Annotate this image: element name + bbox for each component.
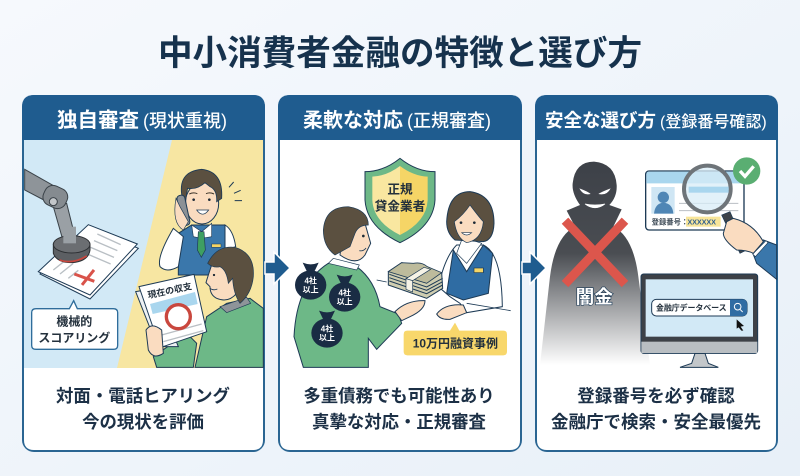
icon: robot arm stamp (25, 169, 138, 299)
figure: loan shark: 闇金 (576, 286, 613, 307)
panel: 柔軟な対応 (278, 95, 522, 452)
icon: debt bag 2: 4社 (338, 287, 351, 297)
callout: 機械的スコアリング: スコアリング (38, 330, 110, 345)
text: 登録番号を必ず確認 (551, 386, 761, 432)
figure: customer with document (136, 247, 263, 367)
figure: customer with debt bags (294, 207, 425, 367)
icon: registration card (646, 157, 760, 230)
icon: debt bag 2 (329, 275, 360, 312)
figure: staff on phone (159, 169, 242, 275)
icon: registration card: 登録番号： (652, 218, 688, 227)
callout: 10万円融資事例 (404, 323, 507, 355)
heading: 独自審査: 独自審査(現状重視) (57, 109, 227, 132)
icon: shield 正規貸金業者: 貸金業者 (375, 199, 426, 214)
text: 多重債務でも可能性あり: 真摯な対応・正規審査 (312, 412, 486, 432)
icon: registration card: XXXXXX (687, 218, 716, 227)
icon: monitor with search (641, 274, 758, 367)
panel: 安全な選び方 (535, 95, 778, 452)
icon: debt bag 1: 以上 (303, 285, 319, 295)
icon: debt bag 3: 以上 (319, 333, 335, 343)
illustration: machine scoring vs hearing (24, 140, 263, 368)
figure: loan shark (540, 162, 650, 365)
icon: money stack (388, 263, 443, 298)
icon: shield 正規貸金業者: 正規 (387, 182, 413, 196)
icon: monitor with search: 金融庁データベース (656, 303, 727, 313)
icon: debt bag 2: 以上 (337, 297, 353, 307)
icon: debt bag 3: 4社 (321, 323, 333, 333)
icon: debt bag 1 (295, 263, 326, 300)
text: 多重債務でも可能性あり (303, 386, 495, 432)
arrow: panel 2 to 3 (522, 252, 546, 284)
icon: shield 正規貸金業者 (365, 158, 435, 243)
illustration: safe selection (540, 157, 777, 367)
callout: 機械的スコアリング: 機械的 (56, 314, 92, 329)
heading: 柔軟な対応: 柔軟な対応(正規審査) (303, 109, 491, 132)
figure: lender staff (377, 192, 511, 319)
callout: 機械的スコアリング (32, 301, 118, 349)
text: 対面・電話ヒアリング (56, 386, 230, 432)
illustration: customer and lender (294, 158, 511, 367)
icon: magnifying glass and hand (684, 166, 777, 279)
heading: 安全な選び方: 安全な選び方(登録番号確認) (545, 110, 767, 131)
text: 登録番号を必ず確認: 金融庁で検索・安全最優先 (551, 412, 761, 432)
title: 中小消費者金融の特徴と選び方 (158, 35, 642, 73)
text: 登録番号を必ず確認: 登録番号を必ず確認 (577, 386, 735, 406)
callout: 10万円融資事例: 10万円融資事例 (413, 336, 498, 351)
text: 対面・電話ヒアリング: 対面・電話ヒアリング (56, 386, 230, 406)
figure: customer with document: 現在の収支 (146, 280, 193, 300)
icon: debt bag 1: 4社 (304, 275, 317, 285)
text: 多重債務でも可能性あり: 多重債務でも可能性あり (303, 386, 495, 406)
panel: 独自審査 (22, 95, 265, 452)
arrow: panel 1 to 2 (265, 252, 290, 284)
icon: debt bag 3 (311, 311, 343, 348)
text: 対面・電話ヒアリング: 今の現状を評価 (82, 412, 204, 432)
